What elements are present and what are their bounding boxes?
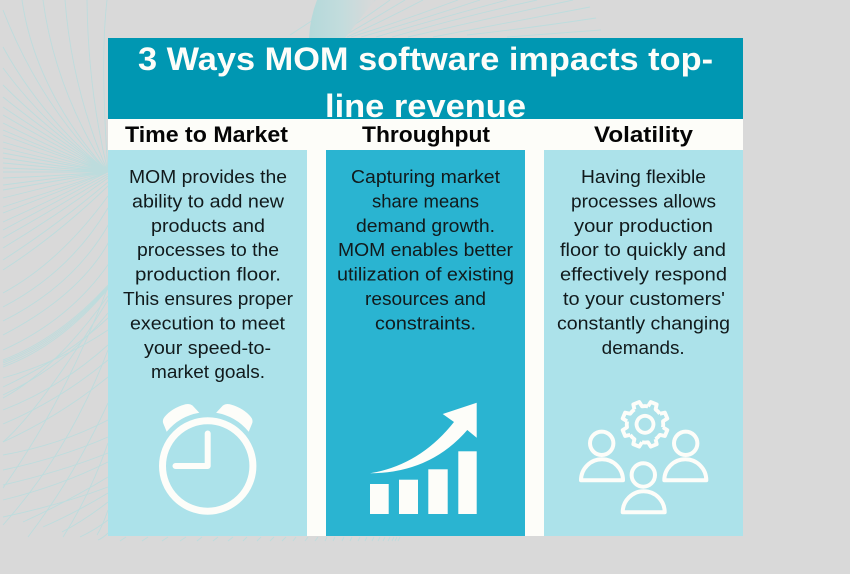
heading band [108, 119, 743, 536]
text block: Time to Market: ability to add new [132, 191, 285, 211]
text block: Volatility: demands. [602, 338, 685, 358]
text block: Time to Market: MOM provides the [129, 167, 287, 187]
text block: Time to Market: This ensures proper [123, 289, 293, 309]
heading: Volatility: Volatility [594, 122, 694, 147]
icon: growth bar chart with arrow [370, 403, 477, 514]
text block: Throughput: resources and [365, 289, 486, 309]
text block: Time to Market: execution to meet [130, 313, 285, 333]
text block: Throughput: MOM enables better [338, 240, 513, 260]
text block: Time to Market [123, 167, 293, 382]
title banner [108, 38, 743, 124]
text block: Volatility: your production [574, 216, 713, 236]
text block: Volatility: constantly changing [557, 313, 730, 333]
text block: Time to Market: market goals. [151, 362, 265, 382]
text block: Throughput: Capturing market [351, 167, 500, 187]
title: 3 Ways MOM software impacts top- [138, 41, 713, 77]
text block: Time to Market: processes to the [137, 240, 279, 260]
heading: Time to Market: Time to Market [125, 122, 289, 147]
text block: Throughput: share means [372, 191, 479, 211]
panel: Time to Market [108, 150, 307, 536]
text block: Volatility: effectively respond [560, 265, 727, 285]
text block: Throughput: utilization of existing [337, 265, 514, 285]
title [138, 41, 713, 124]
text block: Time to Market: production floor. [135, 265, 281, 285]
text block: Throughput: constraints. [375, 313, 476, 333]
text block: Volatility: Having flexible [581, 167, 706, 187]
text block: Volatility: processes allows [571, 191, 716, 211]
title: line revenue [325, 88, 526, 124]
text block: Volatility: to your customers' [563, 289, 725, 309]
text block: Time to Market: your speed-to- [144, 338, 271, 358]
text block: Throughput [337, 167, 514, 333]
icon: team with gear [581, 394, 706, 512]
text block: Volatility: floor to quickly and [560, 240, 726, 260]
heading: Throughput: Throughput [362, 122, 491, 147]
icon: alarm clock [162, 404, 253, 511]
text block: Volatility [557, 167, 730, 358]
panel: Throughput [326, 150, 525, 536]
text block: Time to Market: products and [151, 216, 265, 236]
text block: Throughput: demand growth. [356, 216, 495, 236]
panel: Volatility [544, 150, 743, 536]
